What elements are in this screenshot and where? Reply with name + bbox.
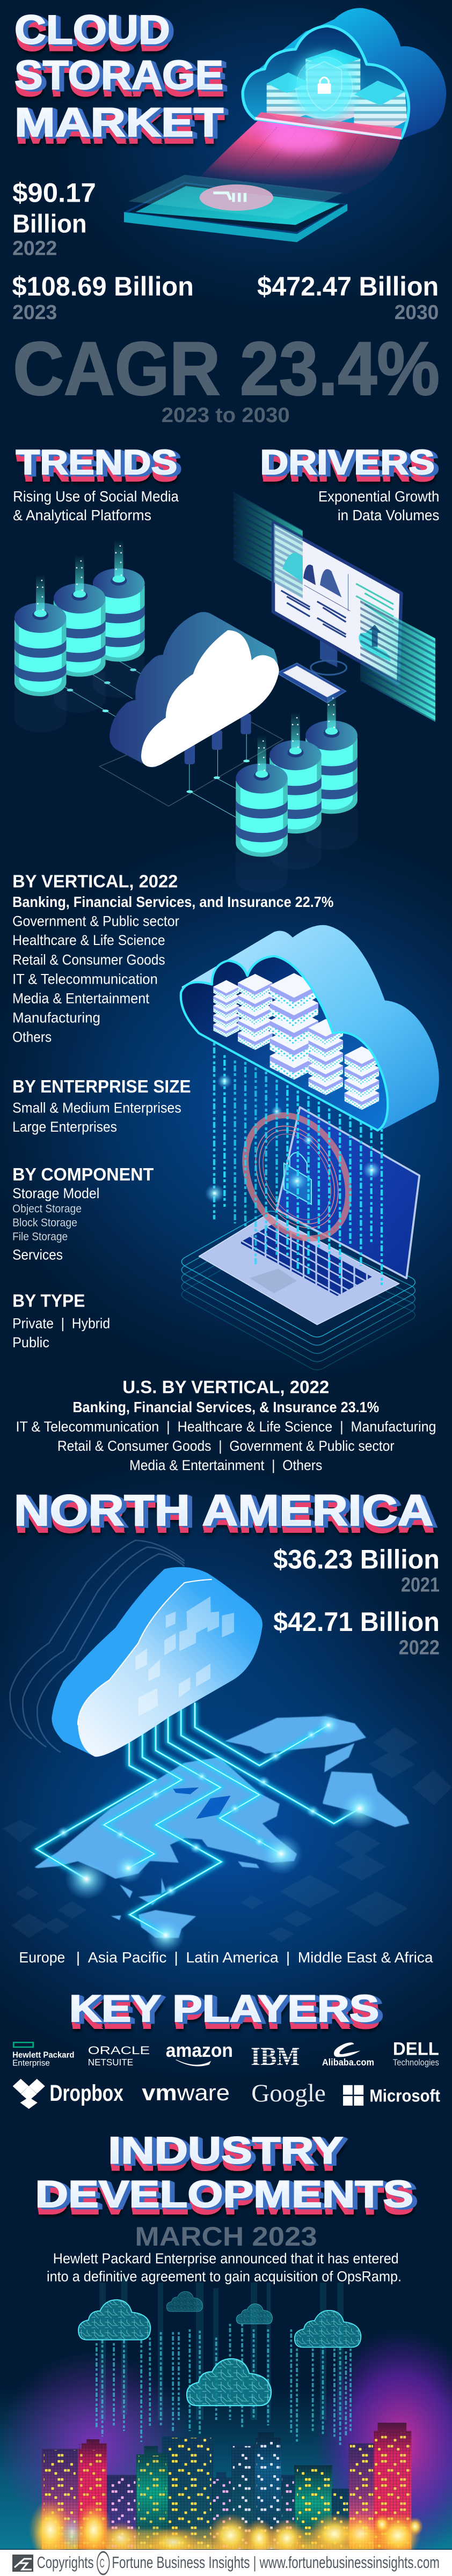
laptop trackpad	[250, 1268, 297, 1293]
text: trends description	[13, 488, 179, 523]
heading: key players: KEY PLAYERS	[69, 1988, 379, 2029]
text: trends description: & Analytical Platforms	[13, 507, 151, 523]
stat: 2022 market size: 2022	[12, 237, 57, 260]
logo: Alibaba	[322, 2042, 374, 2068]
street lights	[29, 2500, 423, 2560]
text: drivers description: Exponential Growth	[318, 488, 439, 505]
laptop screen	[277, 1107, 419, 1278]
segment: by vertical: BY VERTICAL, 2022	[12, 872, 178, 891]
text: other regions	[19, 1949, 433, 1966]
segment: by component: Object Storage	[12, 1202, 82, 1215]
logo: Fortune Business Insights	[12, 2555, 33, 2572]
segment: U.S. by vertical	[16, 1377, 436, 1473]
stat: 2022: $42.71 Billion	[273, 1607, 440, 1637]
laptop keyboard	[239, 1223, 372, 1296]
map of continents	[34, 1716, 410, 1938]
server stack: centre	[305, 49, 360, 124]
segment: by vertical	[12, 872, 333, 1045]
logo: Microsoft: Microsoft	[369, 2086, 440, 2106]
segment: U.S. by vertical: U.S. BY VERTICAL, 2022	[122, 1377, 329, 1397]
stat: 2023 market size: 2023	[12, 301, 57, 324]
segment: by enterprise size: Large Enterprises	[12, 1119, 117, 1135]
text: other regions: Middle East & Africa	[298, 1949, 433, 1966]
illustration: city glow	[0, 2329, 452, 2560]
stat: 2022 market size: Billion	[12, 210, 87, 238]
logo: IBM: IBM	[251, 2042, 300, 2071]
text: other regions: Europe	[19, 1949, 65, 1966]
icon: tablet	[124, 175, 347, 242]
panel: regional map	[3, 1702, 452, 2109]
stat: 2022	[273, 1607, 440, 1659]
stat: 2023 market size	[12, 271, 194, 324]
copyright text: Fortune Business Insights | www.fortunebusinessinsights.com	[112, 2553, 440, 2572]
network lines and floor	[63, 659, 283, 817]
logo: HPE: Hewlett Packard	[12, 2050, 75, 2060]
text: drivers description: in Data Volumes	[338, 507, 439, 523]
segment: by component	[12, 1165, 154, 1263]
text: other regions: |	[174, 1949, 178, 1966]
glow nodes	[57, 1713, 381, 1953]
panel: industry developments	[0, 2129, 452, 2560]
stat: 2022 market size: $90.17	[12, 178, 96, 208]
illustration: laptop under cloud	[181, 925, 439, 1370]
illuminated region lines	[36, 1702, 360, 1935]
text: other regions: Asia Pacific	[88, 1949, 166, 1966]
server stacks	[213, 973, 379, 1110]
segment: by type: Private | Hybrid	[12, 1315, 110, 1331]
cloud edge highlight	[78, 1579, 212, 1725]
circuit clouds	[78, 2292, 361, 2405]
segment: by vertical: IT & Telecommunication	[12, 971, 158, 987]
text: announcement: into a definitive agreement to gain acquisition of OpsRamp.	[47, 2268, 402, 2284]
panel: by type and U.S. vertical	[12, 1291, 440, 1659]
icon: padlock	[284, 1153, 311, 1204]
heading: industry developments	[35, 2129, 413, 2216]
segment: by enterprise size: Small & Medium Enterprises	[12, 1099, 181, 1116]
heading: north america: NORTH AMERICA	[14, 1486, 433, 1534]
logo: Microsoft	[343, 2085, 440, 2106]
text: other regions: |	[76, 1949, 80, 1966]
logo: Oracle NetSuite: ORACLE	[88, 2044, 150, 2057]
segment: by vertical: Retail & Consumer Goods	[12, 951, 165, 968]
cloud floor	[255, 112, 402, 138]
logo: Dell Technologies: Technologies	[393, 2057, 439, 2068]
stat: 2022 market size	[12, 178, 96, 260]
heading: industry developments: INDUSTRY	[108, 2129, 343, 2172]
panel: segments	[12, 872, 439, 1370]
inland seas	[173, 1788, 231, 1819]
illustration: cloud with secure servers over tablet	[124, 8, 446, 242]
city skyline	[42, 2423, 411, 2549]
icon: cloud	[110, 612, 279, 767]
logo: Oracle NetSuite	[88, 2044, 150, 2068]
logo: HPE	[12, 2042, 75, 2068]
logo: Alibaba: Alibaba.com	[322, 2057, 374, 2068]
text: date: MARCH 2023	[135, 2221, 317, 2252]
segment: by enterprise size	[12, 1077, 191, 1135]
data glints	[205, 1074, 381, 1202]
text: other regions: Latin America	[186, 1949, 279, 1966]
segment: by component: Block Storage	[12, 1216, 77, 1229]
title line: storage: STORAGE	[14, 52, 223, 98]
segment: by type: Public	[12, 1334, 49, 1350]
stat: 2021: 2021	[401, 1574, 440, 1596]
laptop base	[199, 1214, 399, 1325]
stat: 2022: 2022	[399, 1637, 440, 1659]
title	[14, 6, 223, 145]
segment: by component: Storage Model	[12, 1185, 99, 1201]
data squares	[135, 1597, 234, 1716]
data stream	[199, 120, 402, 194]
layered circuit outlines	[181, 1211, 415, 1370]
copyright text	[37, 2552, 440, 2574]
segment: by vertical: Manufacturing	[12, 1009, 100, 1025]
illustration: north america cloud	[10, 1540, 263, 1757]
binary rain	[97, 2324, 351, 2447]
icon: shield and lock	[293, 53, 356, 122]
title line: market: MARKET	[14, 99, 223, 145]
logo: Dell Technologies: DELL	[393, 2038, 439, 2059]
cloud with servers	[181, 925, 439, 1131]
text: other regions: |	[286, 1949, 290, 1966]
segment: by vertical: Banking, Financial Services, and Insurance 22.7%	[12, 893, 333, 910]
segment: by component: BY COMPONENT	[12, 1165, 154, 1185]
segment: by vertical: Others	[12, 1029, 52, 1045]
background diamonds	[3, 1727, 452, 1942]
server stack: left	[267, 72, 309, 122]
segment: by component: File Storage	[12, 1230, 68, 1243]
segment: by vertical: Government & Public sector	[12, 913, 179, 929]
heading: trends: TRENDS	[16, 443, 177, 482]
segment: by component: Services	[12, 1246, 63, 1263]
segment: by type	[12, 1291, 110, 1350]
stat: 2030 market size	[257, 271, 439, 324]
text: announcement	[47, 2250, 402, 2284]
segment: U.S. by vertical: Media & Entertainment | Others	[129, 1457, 322, 1473]
segment: by vertical: Healthcare & Life Science	[12, 932, 165, 948]
footer bar	[0, 2550, 452, 2576]
text: trends description: Rising Use of Social Media	[13, 488, 179, 505]
server stack: right	[354, 81, 407, 131]
logo: Amazon: amazon	[166, 2040, 233, 2061]
connectors	[185, 714, 251, 764]
logo: Dell Technologies	[393, 2038, 439, 2068]
stat: 2030 market size: 2030	[395, 301, 439, 324]
illustration: keyboard	[277, 663, 346, 703]
logo: Dropbox	[13, 2079, 123, 2109]
light beams	[99, 2277, 344, 2420]
cloud face	[78, 1579, 263, 1757]
panel: trends and drivers	[13, 443, 439, 893]
heading: industry developments: DEVELOPMENTS	[35, 2173, 413, 2216]
security rings	[226, 1100, 368, 1254]
database stacks: left	[14, 541, 145, 732]
stat: 2023 market size: $108.69 Billion	[12, 271, 194, 301]
logo: HPE: Enterprise	[12, 2058, 50, 2068]
illustration: monitor	[234, 492, 435, 722]
logo: Oracle NetSuite: NETSUITE	[88, 2057, 133, 2068]
panel: headline and market size	[12, 6, 446, 427]
heading: drivers: DRIVERS	[260, 443, 435, 482]
title line: cloud: CLOUD	[14, 6, 170, 53]
stat: CAGR: 2023 to 2030	[162, 404, 290, 427]
logo: VMware: vmware	[142, 2080, 230, 2106]
copyright text: C	[100, 2556, 105, 2570]
binary rain	[214, 1043, 382, 1285]
text: announcement: Hewlett Packard Enterprise announced that it has entered	[53, 2250, 399, 2267]
window grid	[42, 2431, 411, 2549]
icon: cloud	[243, 8, 446, 139]
cloud body	[52, 1567, 263, 1757]
logo: Google: Google	[251, 2079, 326, 2107]
segment: U.S. by vertical: Retail & Consumer Goods | Government & Public sector	[57, 1438, 395, 1454]
stat: 2021: $36.23 Billion	[273, 1545, 440, 1574]
stat: 2021	[273, 1545, 440, 1596]
segment: by enterprise size: BY ENTERPRISE SIZE	[12, 1077, 191, 1097]
stat: 2030 market size: $472.47 Billion	[257, 271, 439, 301]
database stacks: right	[236, 692, 358, 893]
segment: U.S. by vertical: Banking, Financial Services, & Insurance 23.1%	[72, 1399, 379, 1415]
copyright text: Copyrights	[37, 2553, 94, 2572]
segment: by type: BY TYPE	[12, 1291, 85, 1311]
text: drivers description	[318, 488, 439, 523]
faint outline swirls	[10, 1540, 185, 1752]
segment: by vertical: Media & Entertainment	[12, 990, 150, 1006]
logo: Dropbox: Dropbox	[49, 2080, 123, 2106]
lit windows	[44, 2432, 410, 2549]
